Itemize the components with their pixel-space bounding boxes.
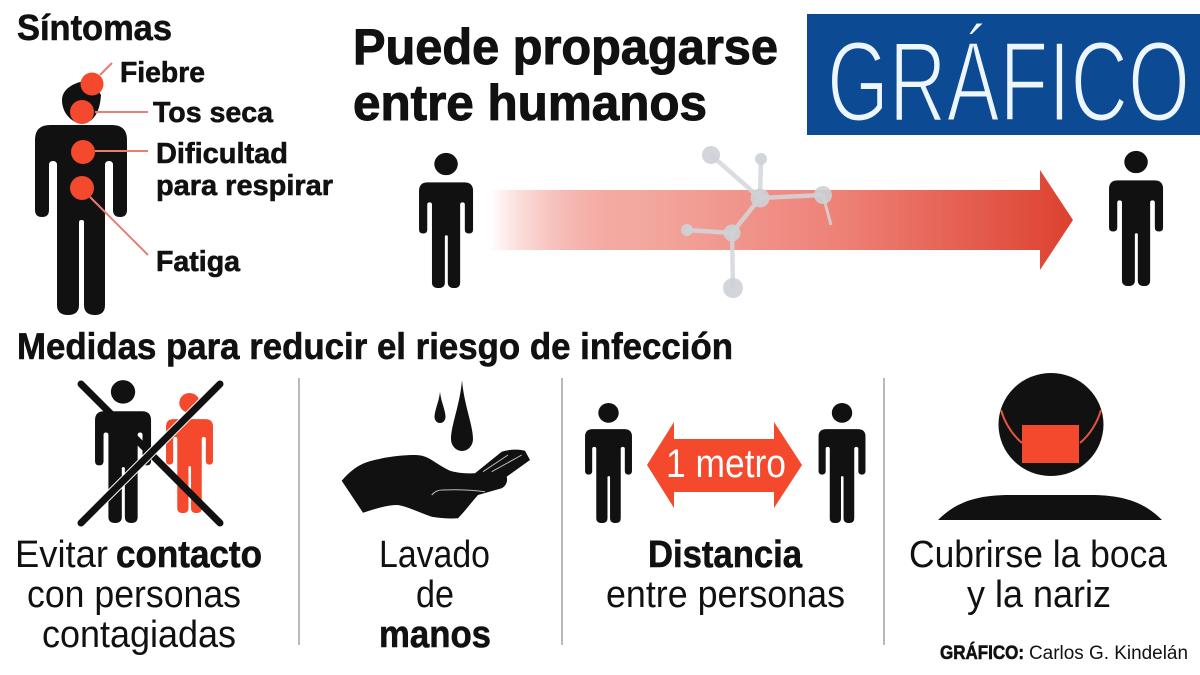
label: Fiebre: Fiebre [120, 57, 205, 89]
text: hand washing [379, 534, 491, 656]
text: cover mouth and nose: Cubrirse la boca [909, 534, 1168, 576]
icon: head with mask [938, 373, 1162, 520]
text: cover mouth and nose: y la nariz [967, 574, 1111, 616]
text: distance [606, 534, 845, 616]
icon: crossed out people [81, 380, 220, 523]
icon: person right [819, 403, 865, 523]
text: hand washing: de [416, 574, 454, 616]
arrow [490, 170, 1073, 270]
text: distance: Distancia [648, 534, 803, 576]
panel: avoid contact [15, 380, 262, 656]
icon: hand with drops [342, 380, 530, 519]
label: Dificultad para respirar: Dificultad [156, 138, 288, 170]
icon: person left [585, 403, 632, 523]
text: avoid contact: contagiadas [42, 614, 236, 656]
figure with symptom markers [35, 63, 148, 315]
panel: cover mouth and nose [909, 373, 1168, 616]
icon: double arrow with 1 metro: 1 metro [666, 442, 786, 486]
icon: person left [419, 153, 473, 288]
credit [940, 642, 1188, 664]
text: avoid contact: con personas [27, 574, 241, 616]
title: Puede propagarse [353, 19, 778, 75]
text: cover mouth and nose [909, 534, 1168, 616]
credit: Carlos G. Kindelán [1029, 643, 1188, 664]
text: hand washing: Lavado [379, 534, 490, 576]
heading: Síntomas: Síntomas [17, 7, 172, 48]
title [353, 19, 778, 131]
icon: double arrow with 1 metro [647, 422, 802, 508]
text: avoid contact: Evitar [15, 534, 108, 576]
credit: GRÁFICO: [940, 642, 1024, 664]
label: Dificultad para respirar [156, 138, 333, 202]
label: Dificultad para respirar: para respirar [156, 170, 333, 202]
panel: hand washing [342, 380, 530, 656]
heading: measures: Medidas para reducir el riesgo de infección [17, 326, 733, 367]
panel: distance [585, 403, 865, 616]
text: distance: entre personas [606, 574, 845, 616]
panel: symptoms [17, 7, 333, 315]
label: Fatiga: Fatiga [156, 246, 241, 278]
text: avoid contact: contacto [116, 534, 262, 576]
text: hand washing: manos [379, 614, 491, 656]
label: Tos seca: Tos seca [153, 97, 274, 129]
title: entre humanos [353, 75, 707, 131]
text: avoid contact [15, 534, 262, 656]
panel: transmission [419, 146, 1163, 298]
icon: person right [1109, 151, 1163, 286]
icon: virus molecule [681, 146, 832, 298]
